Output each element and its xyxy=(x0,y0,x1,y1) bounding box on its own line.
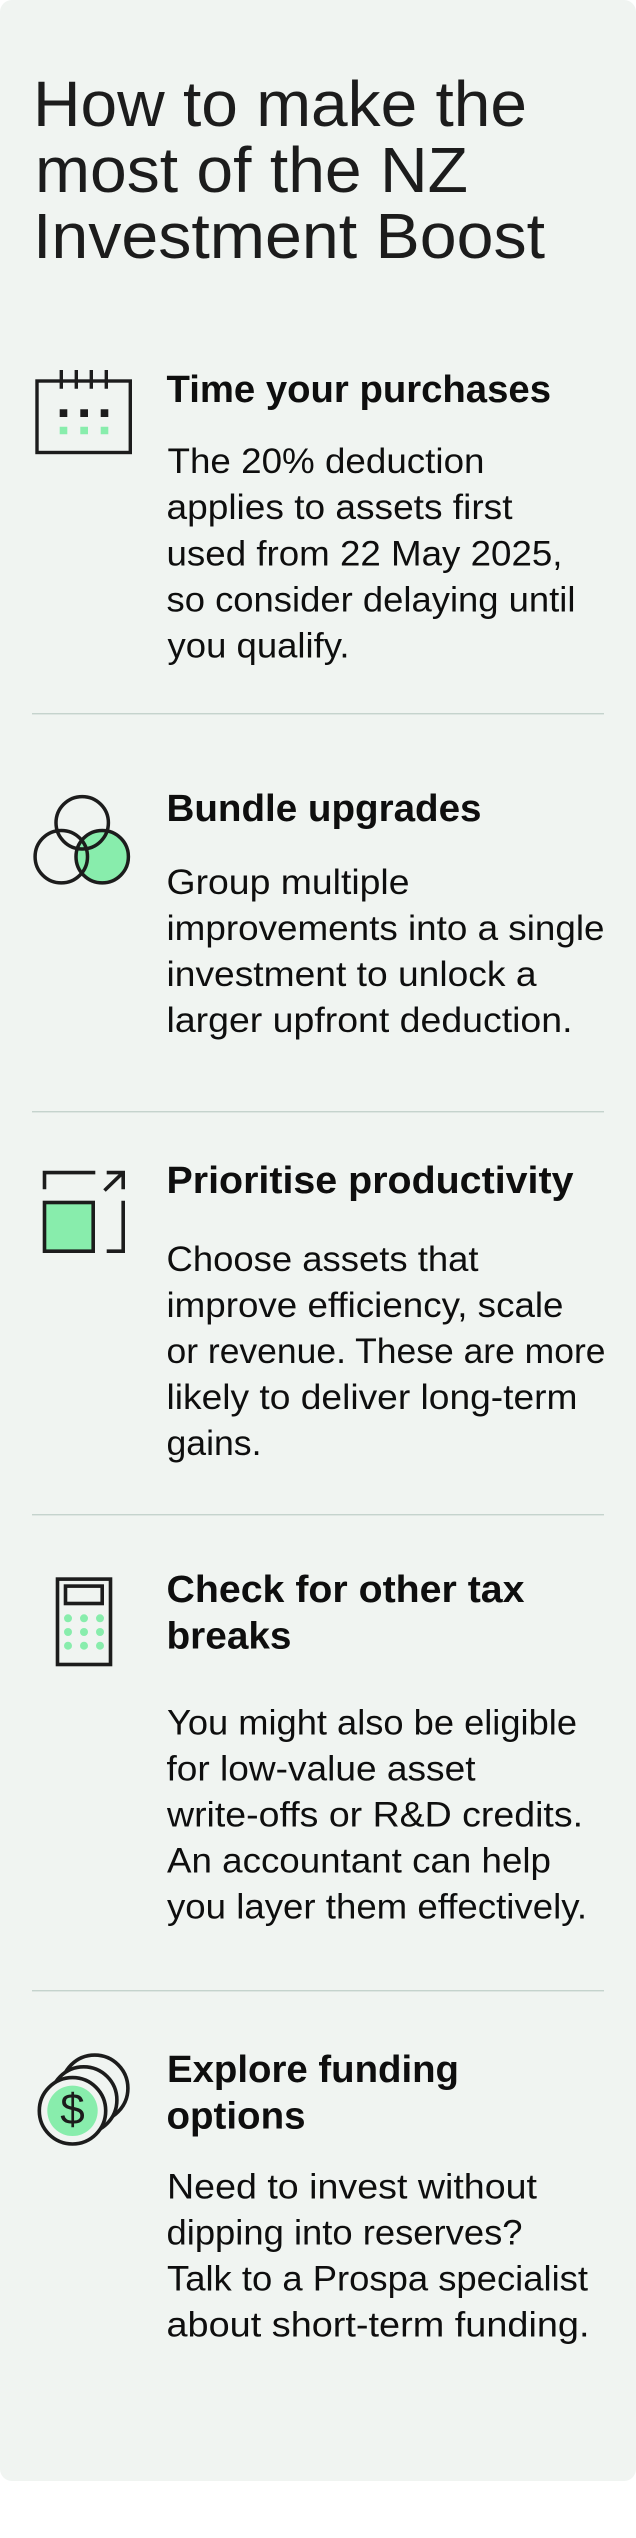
text block: An accountant can help xyxy=(167,1840,551,1880)
icon: dollar coins: $ xyxy=(60,2085,85,2134)
heading: Prioritise productivity xyxy=(166,1160,574,1202)
text block: about short-term funding. xyxy=(166,2304,590,2344)
text block xyxy=(166,1239,606,1463)
title: Investment Boost xyxy=(33,200,545,272)
text block: used from 22 May 2025, xyxy=(166,534,562,574)
icon: overlapping circles xyxy=(35,797,128,883)
text block: applies to assets first xyxy=(166,487,513,527)
heading: Time your purchases xyxy=(166,369,551,411)
panel: bundle upgrades xyxy=(35,788,605,1040)
text block: likely to deliver long-term xyxy=(166,1377,578,1417)
text block: improvements into a single xyxy=(166,908,604,948)
title xyxy=(33,68,545,272)
text block: you qualify. xyxy=(168,626,350,666)
heading xyxy=(166,2049,459,2138)
text block: gains. xyxy=(166,1423,262,1463)
text block: write-offs or R&D credits. xyxy=(166,1794,583,1834)
text block: You might also be eligible xyxy=(167,1702,577,1742)
title: How to make the xyxy=(33,68,527,140)
heading: Explore funding xyxy=(167,2049,459,2091)
text block xyxy=(166,862,604,1040)
text block: Choose assets that xyxy=(166,1239,479,1279)
text block: for low-value asset xyxy=(166,1748,476,1788)
text block: The 20% deduction xyxy=(168,441,485,481)
text block: investment to unlock a xyxy=(166,954,537,994)
text block: improve efficiency, scale xyxy=(166,1285,564,1325)
panel: explore funding options xyxy=(39,2049,590,2344)
text block: Need to invest without xyxy=(167,2166,537,2206)
panel: check for other tax breaks xyxy=(58,1569,587,1926)
text block: larger upfront deduction. xyxy=(166,1000,572,1040)
heading: Bundle upgrades xyxy=(166,788,482,830)
heading xyxy=(166,1569,524,1658)
text block xyxy=(166,441,576,666)
text block: Talk to a Prospa specialist xyxy=(167,2258,588,2298)
text block: dipping into reserves? xyxy=(166,2212,522,2252)
heading: options xyxy=(166,2096,306,2138)
heading: breaks xyxy=(166,1616,292,1658)
text block xyxy=(166,2166,590,2344)
heading: Check for other tax xyxy=(166,1569,524,1611)
text block xyxy=(166,1702,587,1926)
icon: dollar coins xyxy=(39,2055,128,2144)
text block: Group multiple xyxy=(166,862,410,902)
panel: prioritise productivity xyxy=(44,1160,606,1463)
panel: time your purchases xyxy=(37,369,576,666)
icon: calculator xyxy=(58,1579,110,1664)
icon: calendar xyxy=(37,370,130,452)
title: most of the NZ xyxy=(35,134,468,206)
text block: you layer them effectively. xyxy=(167,1886,587,1926)
text block: or revenue. These are more xyxy=(166,1331,606,1371)
icon: expand square with arrow xyxy=(44,1173,123,1251)
text block: so consider delaying until xyxy=(166,580,576,620)
